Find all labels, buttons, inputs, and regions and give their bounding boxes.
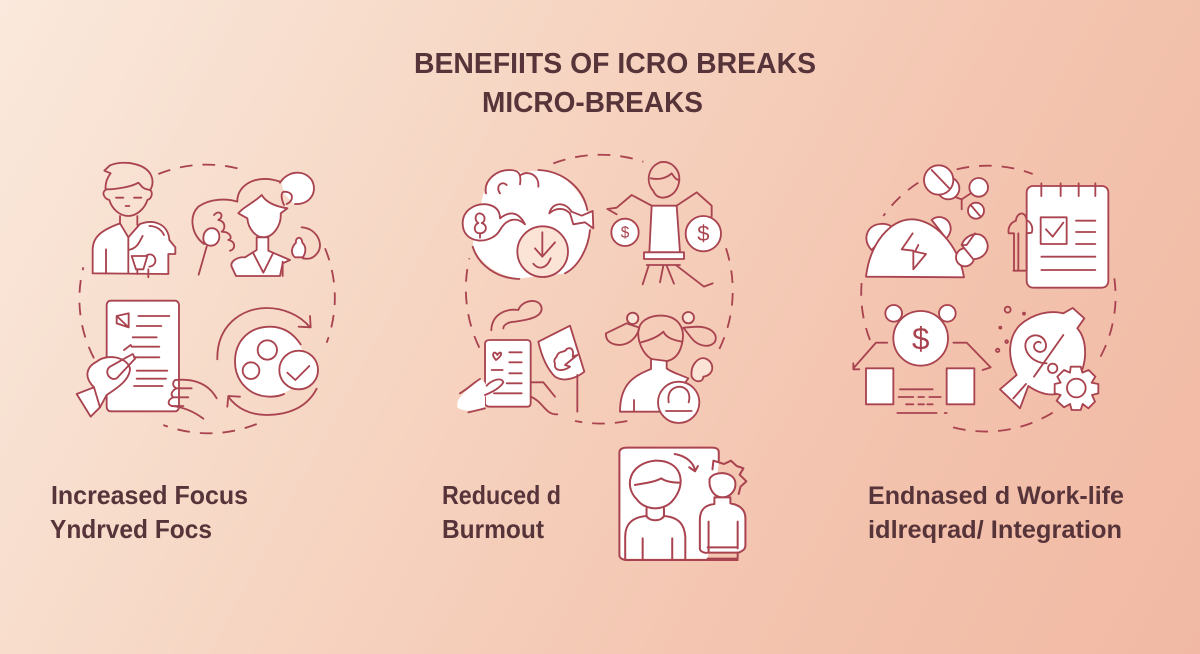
icon: energy dome bbox=[866, 217, 988, 277]
panel: increased focus icons bbox=[77, 163, 335, 433]
icon: checklist notebook bbox=[1008, 183, 1108, 288]
label: work-life integration bbox=[868, 482, 1124, 544]
dashed ring bbox=[79, 165, 335, 433]
icon: cycle with check bbox=[217, 308, 318, 415]
label: reduced burnout: Burmout bbox=[442, 514, 544, 544]
icon: person with coins bbox=[607, 162, 721, 287]
icon: girl with pigtails bbox=[606, 312, 716, 423]
label: work-life integration: idlreqrad/ Integration bbox=[868, 516, 1122, 544]
icon: coin and house bbox=[853, 305, 991, 413]
icon: document with hands bbox=[77, 301, 217, 419]
icon: tablet, hand and mask bbox=[457, 301, 584, 414]
label: reduced burnout: Reduced d bbox=[442, 480, 561, 510]
icon: coin and house: $ bbox=[912, 321, 929, 356]
icon: pills bbox=[924, 165, 988, 219]
icon: man with mug bbox=[93, 163, 175, 277]
label: increased focus bbox=[50, 480, 248, 544]
label: reduced burnout bbox=[442, 480, 561, 544]
icon: two people panel bbox=[619, 448, 746, 560]
icon: person with coins: $ bbox=[697, 221, 709, 246]
label: increased focus: Increased Focus bbox=[51, 480, 248, 510]
label: increased focus: Yndrved Focs bbox=[50, 514, 212, 544]
dashed ring bbox=[861, 166, 1116, 432]
title: BENEFIITS OF ICRO BREAKS bbox=[414, 48, 816, 80]
panel: work-life integration icons bbox=[853, 165, 1116, 432]
title bbox=[414, 48, 816, 119]
icon: percent tag and gear bbox=[996, 307, 1098, 410]
panel: reduced burnout icons bbox=[457, 155, 733, 424]
icon: person with coins: $ bbox=[621, 225, 630, 242]
label: work-life integration: Endnased d Work-life bbox=[868, 482, 1124, 510]
dashed ring bbox=[466, 155, 733, 424]
title: MICRO-BREAKS bbox=[482, 87, 703, 119]
icon: woman with thought curls bbox=[192, 173, 320, 276]
icon: brain with down arrow bbox=[463, 170, 593, 279]
